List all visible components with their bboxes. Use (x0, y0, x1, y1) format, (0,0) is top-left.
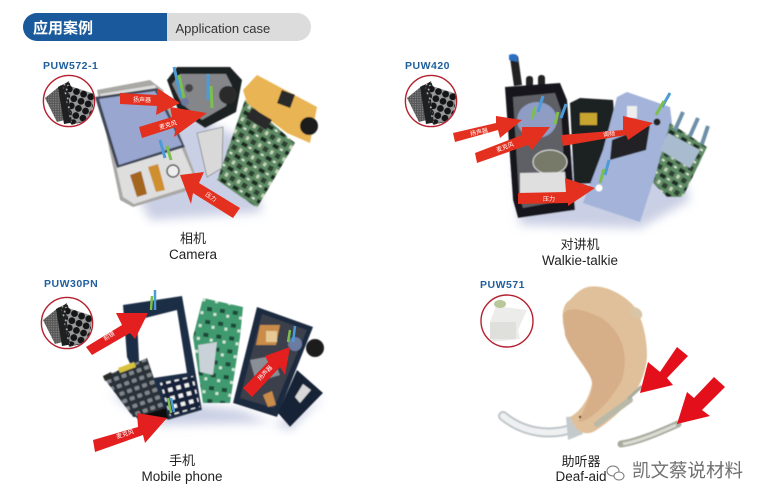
hearing aid illustration (503, 286, 678, 444)
model label PUW571: PUW571 (480, 279, 525, 291)
watermark text: 凯文蔡说材料 (632, 460, 743, 481)
sample swatch (43, 75, 95, 127)
arrow: speaker (453, 116, 522, 142)
header English title: Application case (176, 21, 270, 36)
arrow: upper pointer (640, 347, 688, 393)
arrow: speaker: 扬声器 (469, 126, 489, 138)
panel: walkie-talkie (405, 54, 708, 268)
blue and green vent arrows (160, 67, 212, 160)
arrow: front lens (86, 313, 148, 355)
arrow: pressure: 压力 (204, 190, 218, 204)
header Chinese title: 应用案例 (33, 19, 93, 37)
caption: deaf-aid (555, 454, 607, 484)
sample swatch (405, 75, 457, 127)
caption: walkie-talkie (542, 237, 618, 268)
arrow: microphone (93, 413, 167, 452)
arrow: pressure (180, 172, 240, 218)
arrow: lower pointer (677, 377, 725, 424)
arrow: speaker (120, 88, 180, 115)
panel: hearing aid (480, 279, 725, 484)
watermark (607, 460, 743, 481)
arrow: microphone: 麦克风 (158, 119, 178, 131)
icon: wechat bubbles (607, 466, 624, 480)
arrow: speaker: 扬声器 (256, 364, 274, 382)
model label PUW30PN: PUW30PN (44, 278, 98, 290)
panel: camera (43, 60, 318, 262)
model label PUW420: PUW420 (405, 60, 450, 72)
caption: camera: Camera (169, 247, 217, 262)
arrow: microphone (139, 107, 207, 138)
caption: walkie-talkie: Walkie-talkie (542, 253, 618, 268)
blue and green vent arrows (532, 93, 670, 183)
caption: deaf-aid: Deaf-aid (555, 469, 607, 484)
arrow: tuning (561, 116, 653, 146)
arrow: speaker (243, 347, 290, 397)
arrow: pressure: 压力 (543, 195, 555, 203)
caption: mobile phone: Mobile phone (141, 469, 223, 484)
blue and green vent arrows (151, 290, 295, 413)
arrow: pressure (518, 178, 595, 206)
caption: deaf-aid: 助听器 (561, 454, 601, 469)
sample swatch (41, 297, 93, 349)
camera illustration (95, 67, 318, 220)
arrow: tuning: 调频 (603, 129, 615, 139)
mobile phone illustration (103, 296, 325, 430)
arrow: speaker: 扬声器 (133, 96, 151, 104)
caption: camera: 相机 (180, 231, 206, 246)
sample swatch: white roll (481, 295, 533, 347)
model label PUW572-1: PUW572-1 (43, 60, 98, 72)
caption: mobile phone (141, 453, 223, 484)
arrow: microphone: 麦克风 (495, 140, 515, 154)
caption: mobile phone: 手机 (169, 453, 195, 468)
caption: camera (169, 231, 217, 262)
arrow: microphone: 麦克风 (115, 427, 135, 441)
header banner (23, 13, 311, 41)
caption: walkie-talkie: 对讲机 (560, 237, 600, 252)
panel: mobile phone (41, 278, 325, 484)
arrow: front lens: 前镜 (102, 329, 116, 343)
walkie-talkie illustration (505, 54, 708, 228)
arrow: microphone (475, 127, 550, 163)
